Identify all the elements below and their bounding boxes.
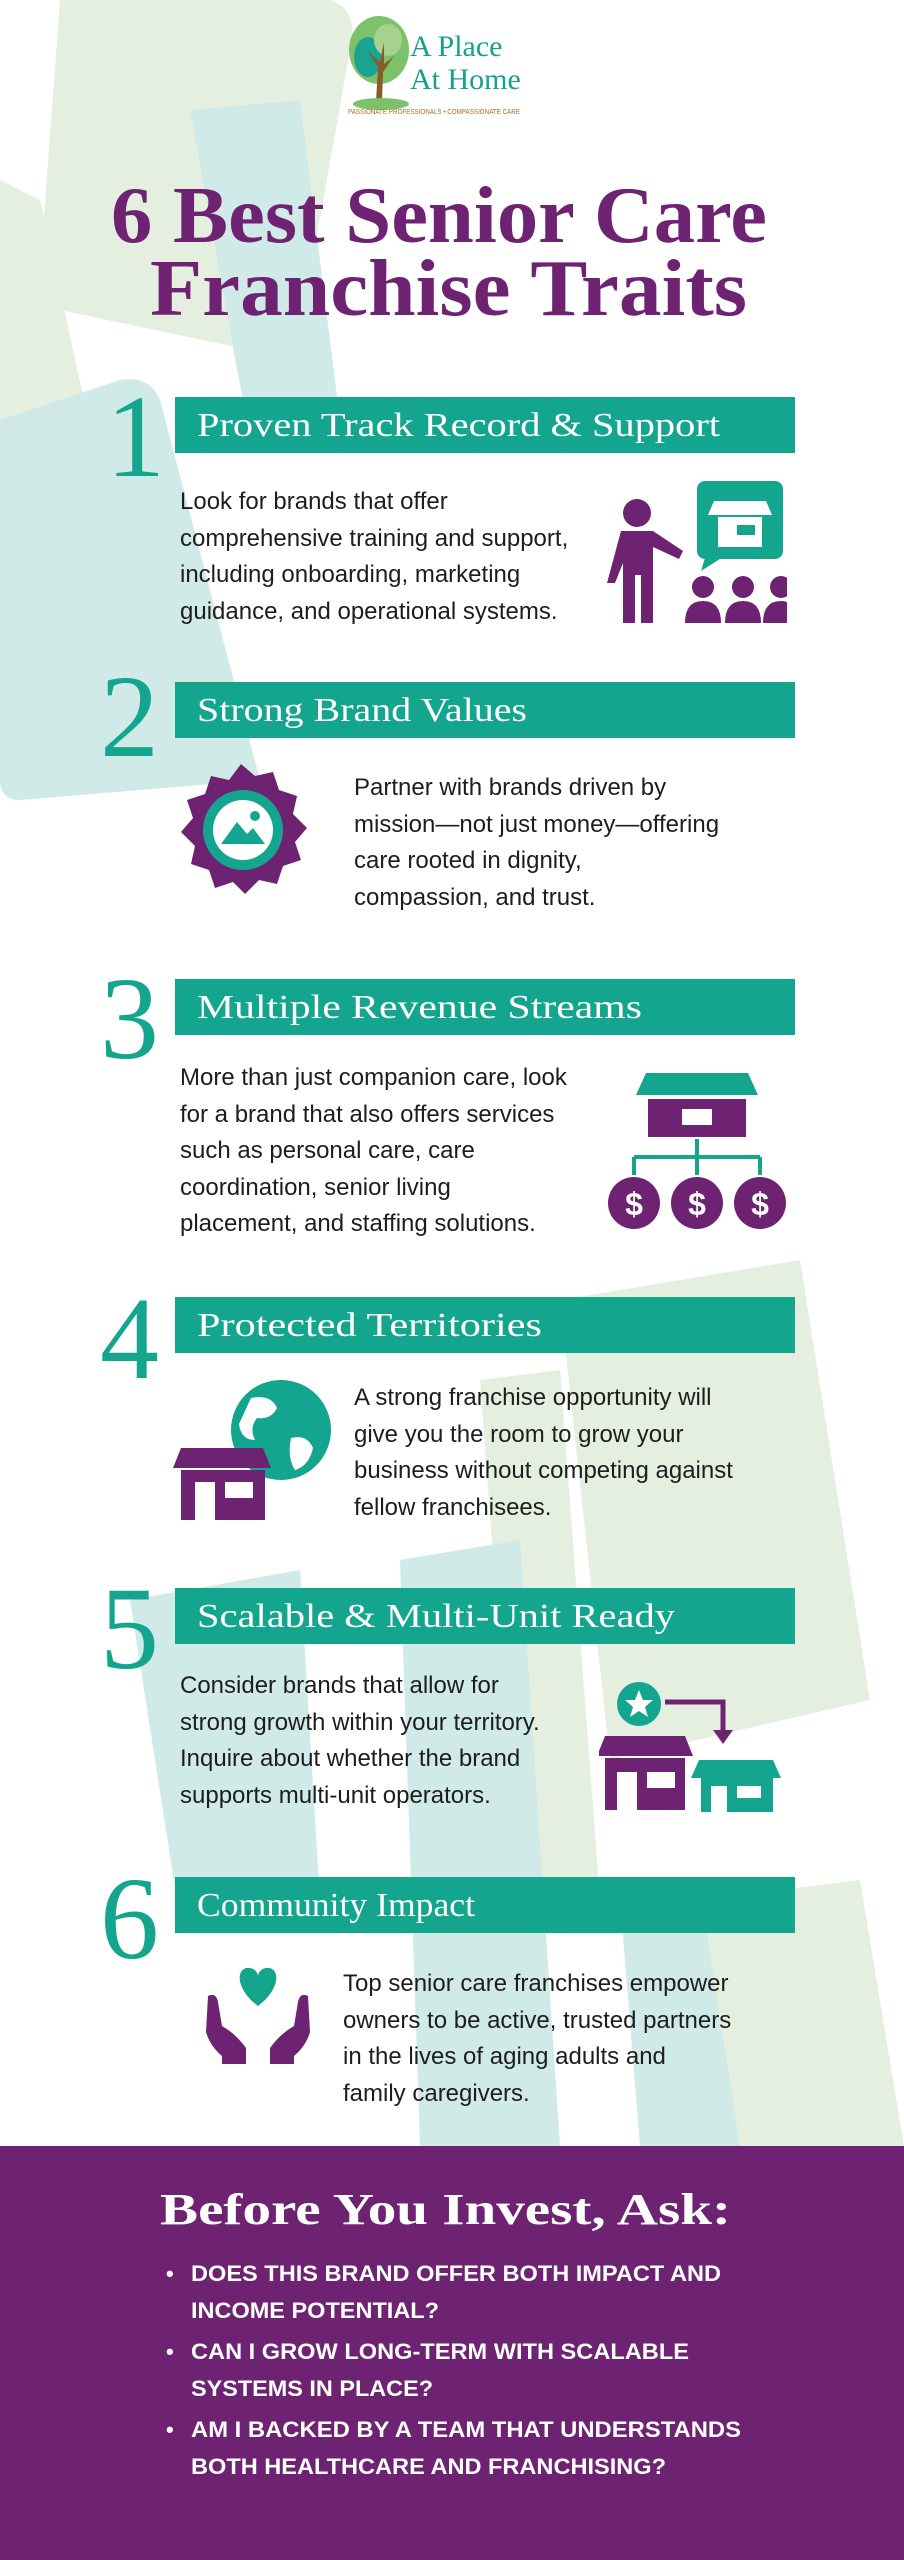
text 3: such as personal care, care	[180, 1137, 475, 1164]
text 4	[354, 1384, 733, 1520]
icon: presenter with store	[607, 481, 787, 623]
icon: tree	[349, 16, 409, 110]
text 1: comprehensive training and support,	[180, 524, 568, 552]
icon: store with dollars: $	[751, 1186, 769, 1222]
text 3: placement, and staffing solutions.	[180, 1210, 536, 1237]
text 3: for a brand that also offers services	[180, 1100, 554, 1128]
title: 6 Best Senior Care	[111, 172, 767, 260]
text 5: Inquire about whether the brand	[180, 1745, 520, 1772]
heading bar 3	[175, 979, 795, 1035]
section 6	[100, 1853, 795, 2106]
text 4: give you the room to grow your	[354, 1420, 684, 1448]
questions list: SYSTEMS IN PLACE?	[191, 2376, 433, 2401]
text 2: compassion, and trust.	[354, 884, 595, 910]
text 6: Top senior care franchises empower	[343, 1970, 729, 1997]
heading bar 1	[175, 397, 795, 453]
text 3: coordination, senior living	[180, 1174, 451, 1200]
footer panel: before you invest	[0, 2146, 904, 2560]
section 2	[100, 651, 795, 910]
title	[111, 172, 767, 330]
text 5: Consider brands that allow for	[180, 1672, 499, 1699]
questions list: •	[166, 2417, 174, 2442]
text 2: care rooted in dignity,	[354, 847, 582, 874]
text 5: supports multi-unit operators.	[180, 1782, 491, 1808]
heading bar 2	[175, 682, 795, 738]
questions list: DOES THIS BRAND OFFER BOTH IMPACT AND	[191, 2261, 721, 2286]
heading bar 1: Proven Track Record & Support	[197, 407, 721, 444]
text 4: business without competing against	[354, 1457, 733, 1484]
heading bar 4: Protected Territories	[197, 1307, 542, 1344]
text 2: Partner with brands driven by	[354, 774, 666, 801]
icon: store with dollars: $	[688, 1186, 706, 1222]
heading bar 5: Scalable & Multi-Unit Ready	[197, 1598, 675, 1635]
text 4: A strong franchise opportunity will	[354, 1384, 712, 1411]
number 2: 2	[100, 651, 159, 782]
questions list: AM I BACKED BY A TEAM THAT UNDERSTANDS	[191, 2417, 741, 2442]
text 1: including onboarding, marketing	[180, 561, 520, 588]
logo: A Place	[410, 30, 502, 63]
logo: At Home	[410, 63, 521, 96]
number 6: 6	[100, 1853, 159, 1984]
text 6: family caregivers.	[343, 2080, 530, 2106]
logo	[348, 16, 521, 116]
footer heading: Before You Invest, Ask:	[160, 2185, 731, 2234]
number 3: 3	[100, 953, 159, 1084]
text 2: mission—not just money—offering	[354, 810, 719, 838]
text 6	[343, 1970, 731, 2106]
text 2	[354, 774, 719, 910]
section 3	[100, 953, 795, 1237]
questions list: INCOME POTENTIAL?	[191, 2298, 439, 2323]
icon: store and globe	[173, 1380, 331, 1520]
number 5: 5	[100, 1563, 159, 1694]
icon: hands with heart	[206, 1968, 310, 2064]
text 1: guidance, and operational systems.	[180, 598, 558, 624]
icon: store with dollars	[608, 1073, 786, 1229]
icon: store expansion	[599, 1682, 781, 1812]
text 3: More than just companion care, look	[180, 1064, 567, 1091]
text 5	[180, 1672, 540, 1808]
number 4: 4	[100, 1273, 159, 1404]
number 1: 1	[106, 371, 165, 502]
section 5	[100, 1563, 795, 1812]
heading bar 5	[175, 1588, 795, 1644]
questions list: BOTH HEALTHCARE AND FRANCHISING?	[191, 2454, 666, 2479]
text 5: strong growth within your territory.	[180, 1708, 540, 1736]
section 1	[106, 371, 795, 624]
heading bar 3: Multiple Revenue Streams	[197, 989, 642, 1026]
text 6: owners to be active, trusted partners	[343, 2006, 731, 2034]
icon: store with dollars: $	[625, 1186, 643, 1222]
text 6: in the lives of aging adults and	[343, 2043, 666, 2070]
text 4: fellow franchisees.	[354, 1494, 551, 1520]
questions list: •	[166, 2339, 174, 2364]
text 1: Look for brands that offer	[180, 488, 448, 515]
heading bar 6: Community Impact	[197, 1887, 476, 1924]
icon: badge	[181, 764, 307, 894]
questions list: CAN I GROW LONG-TERM WITH SCALABLE	[191, 2339, 689, 2364]
heading bar 6	[175, 1877, 795, 1933]
text 3	[180, 1064, 567, 1237]
questions list: •	[166, 2261, 174, 2286]
questions list	[166, 2261, 741, 2479]
section 4	[100, 1273, 795, 1520]
text 1	[180, 488, 568, 624]
heading bar 4	[175, 1297, 795, 1353]
heading bar 2: Strong Brand Values	[197, 692, 527, 729]
